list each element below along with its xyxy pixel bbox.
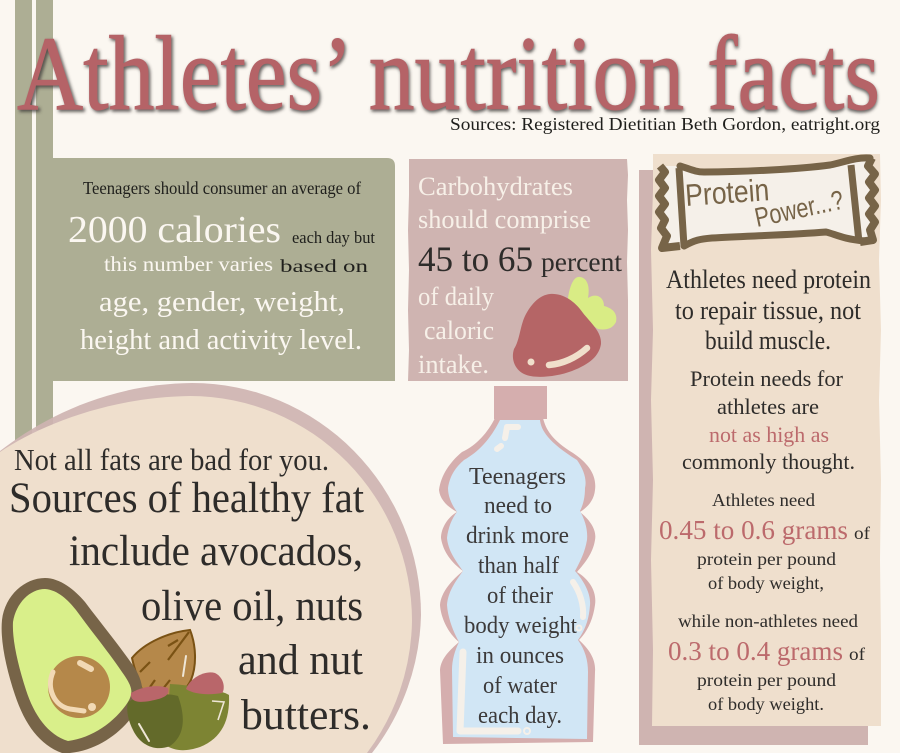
protein main text: to repair tissue, not: [675, 296, 862, 325]
carbohydrates text: intake.: [418, 349, 489, 379]
non-athlete protein need: 0.3 to 0.4 grams: [668, 636, 843, 666]
panel: carbohydrates: [408, 159, 628, 381]
fats intro text: Not all fats are bad for you.: [14, 443, 329, 477]
calories intro text: Teenagers should consumer an average of: [83, 178, 361, 198]
bottle text: need to: [484, 493, 552, 519]
non-athlete protein need: protein per pound: [697, 670, 836, 690]
protein bar label: Protein: [684, 172, 770, 213]
fats main text: include avocados,: [69, 528, 363, 575]
panel: calories: [36, 158, 395, 381]
bottle text: of water: [483, 673, 557, 699]
carbohydrates text: should comprise: [418, 204, 591, 234]
calories figure: each day but: [292, 228, 375, 247]
fats main text: olive oil, nuts: [141, 583, 363, 630]
bottle text: [464, 464, 577, 729]
carbohydrates text: [418, 171, 591, 379]
icon: pistachios: [127, 672, 229, 750]
fats main text: Sources of healthy fat: [9, 475, 364, 522]
carbohydrates text: of daily: [418, 281, 495, 311]
bottle text: in ounces: [476, 643, 564, 669]
icon: almond: [132, 630, 195, 697]
fats main text: and nut: [238, 637, 363, 684]
protein main text: Athletes need protein: [666, 265, 871, 294]
carbohydrates text: caloric: [424, 315, 494, 345]
carbohydrates text: Carbohydrates: [418, 171, 573, 201]
icon: avocado: [2, 578, 142, 753]
protein needs text: not as high as: [709, 422, 829, 447]
athlete protein need: [659, 490, 870, 593]
bottle text: than half: [478, 553, 559, 579]
non-athlete protein need: of body weight.: [708, 694, 824, 714]
bottle text: of their: [487, 583, 553, 609]
icon: water bottle: [439, 386, 595, 744]
protein needs text: athletes are: [717, 394, 819, 419]
panel: protein: [639, 154, 881, 745]
calories factors text: age, gender, weight,: [99, 287, 345, 318]
protein needs text: [682, 366, 855, 474]
calories variation text: based on: [280, 256, 368, 276]
athlete protein need: Athletes need: [712, 490, 815, 510]
fats main text: [9, 475, 371, 739]
bottle text: body weight: [464, 613, 577, 639]
non-athlete protein need: of: [849, 644, 865, 664]
decorative green bars: [15, 0, 53, 440]
bottle text: Teenagers: [469, 464, 566, 490]
protein bar label: [684, 172, 846, 233]
athlete protein need: protein per pound: [697, 549, 836, 569]
protein bar label: Power...?: [752, 185, 846, 233]
calories factors text: [80, 287, 362, 356]
calories figure: 2000 calories: [68, 209, 281, 251]
icon: strawberry: [513, 277, 616, 377]
athlete protein need: 0.45 to 0.6 grams: [659, 515, 848, 545]
protein main text: build muscle.: [705, 326, 831, 355]
calories factors text: height and activity level.: [80, 325, 362, 356]
calories variation text: this number varies: [104, 252, 273, 276]
bottle highlights: [460, 427, 583, 732]
panel: healthy fats: [0, 383, 421, 753]
carbohydrates percentage: percent: [541, 247, 622, 277]
non-athlete protein need: [668, 611, 865, 714]
calories figure: [68, 209, 375, 251]
protein needs text: Protein needs for: [690, 366, 844, 391]
protein needs text: commonly thought.: [682, 449, 855, 474]
fats main text: butters.: [241, 692, 371, 739]
bottle text: each day.: [478, 703, 562, 729]
bottle text: drink more: [466, 523, 569, 549]
sources line: Sources: Registered Dietitian Beth Gordon, eatright.org: [450, 114, 880, 134]
carbohydrates percentage: 45 to 65: [418, 239, 533, 279]
carbohydrates percentage: [418, 239, 622, 279]
athlete protein need: of: [854, 523, 870, 543]
athlete protein need: of body weight,: [708, 573, 824, 593]
icon: protein bar wrapper: [659, 158, 875, 249]
protein main text: [666, 265, 871, 355]
calories variation text: [104, 252, 368, 276]
non-athlete protein need: while non-athletes need: [678, 611, 858, 631]
